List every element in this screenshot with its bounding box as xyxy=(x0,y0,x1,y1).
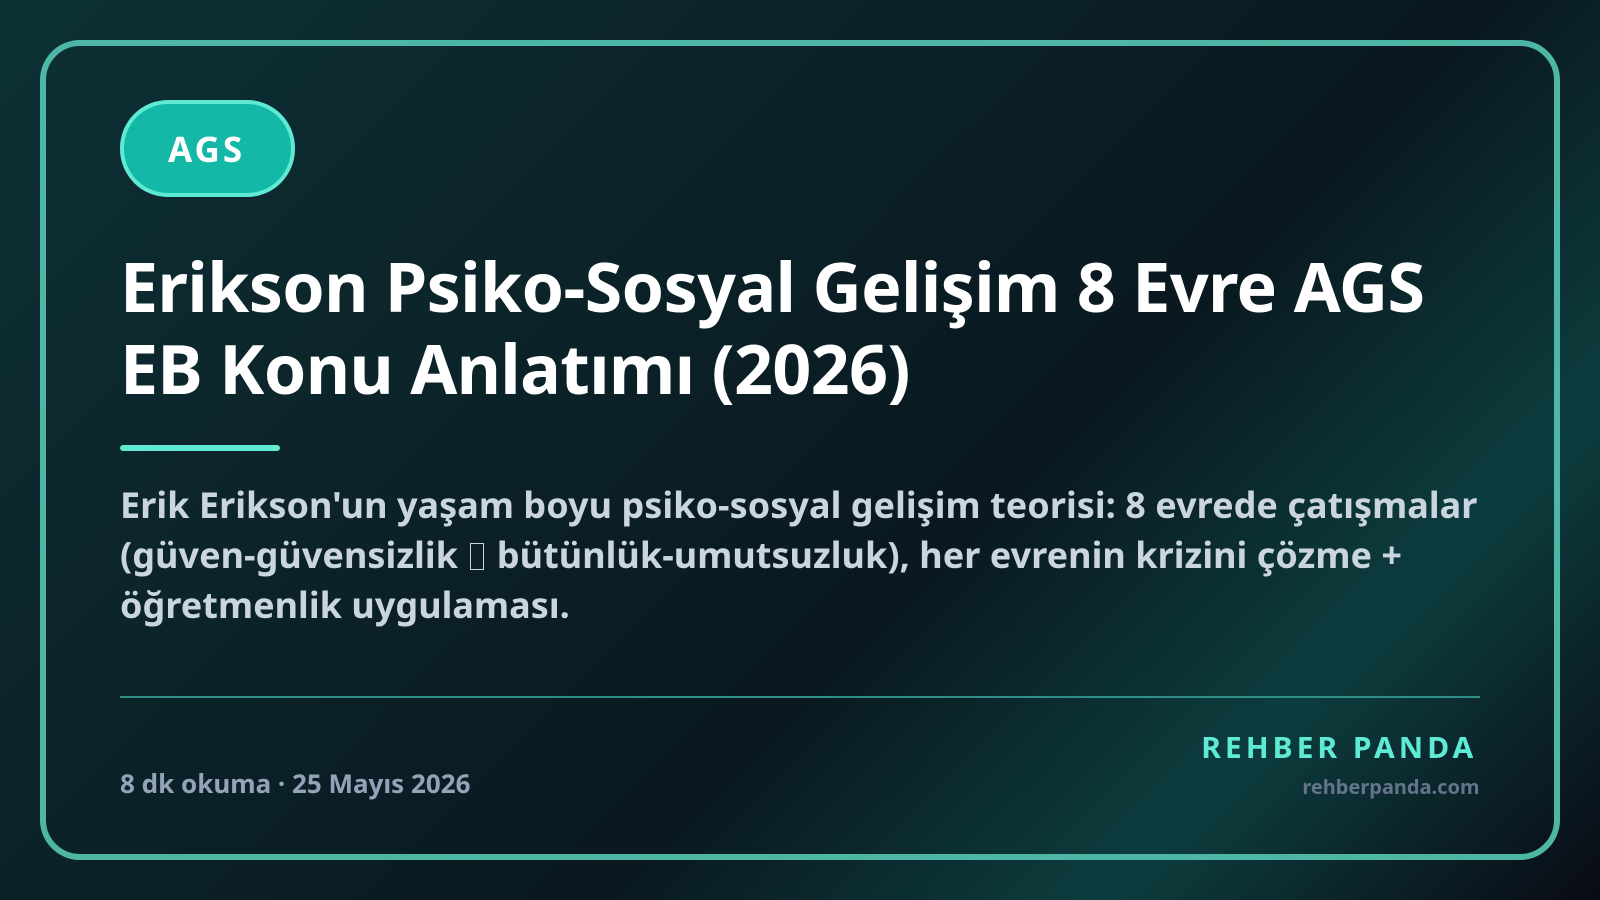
description text: öğretmenlik uygulaması. xyxy=(120,580,570,629)
reading time and date: 8 dk okuma · 25 Mayıs 2026 xyxy=(120,765,470,801)
divider xyxy=(120,696,1480,698)
description text xyxy=(120,480,1477,629)
badge: AGS: AGS xyxy=(168,126,245,173)
badge: AGS xyxy=(120,100,295,197)
description text: (güven-güvensizlik bütünlük-umutsuzluk), her evrenin krizini çözme + xyxy=(120,530,1402,579)
brand name: REHBER PANDA xyxy=(1201,726,1477,767)
description text: Erik Erikson'un yaşam boyu psiko-sosyal gelişim teorisi: 8 evrede çatışmalar xyxy=(120,480,1477,529)
accent bar xyxy=(120,445,280,451)
title: EB Konu Anlatımı (2026) xyxy=(120,321,910,414)
title xyxy=(120,239,1424,414)
title: Erikson Psiko-Sosyal Gelişim 8 Evre AGS xyxy=(120,239,1424,332)
brand website: rehberpanda.com xyxy=(1302,773,1480,800)
